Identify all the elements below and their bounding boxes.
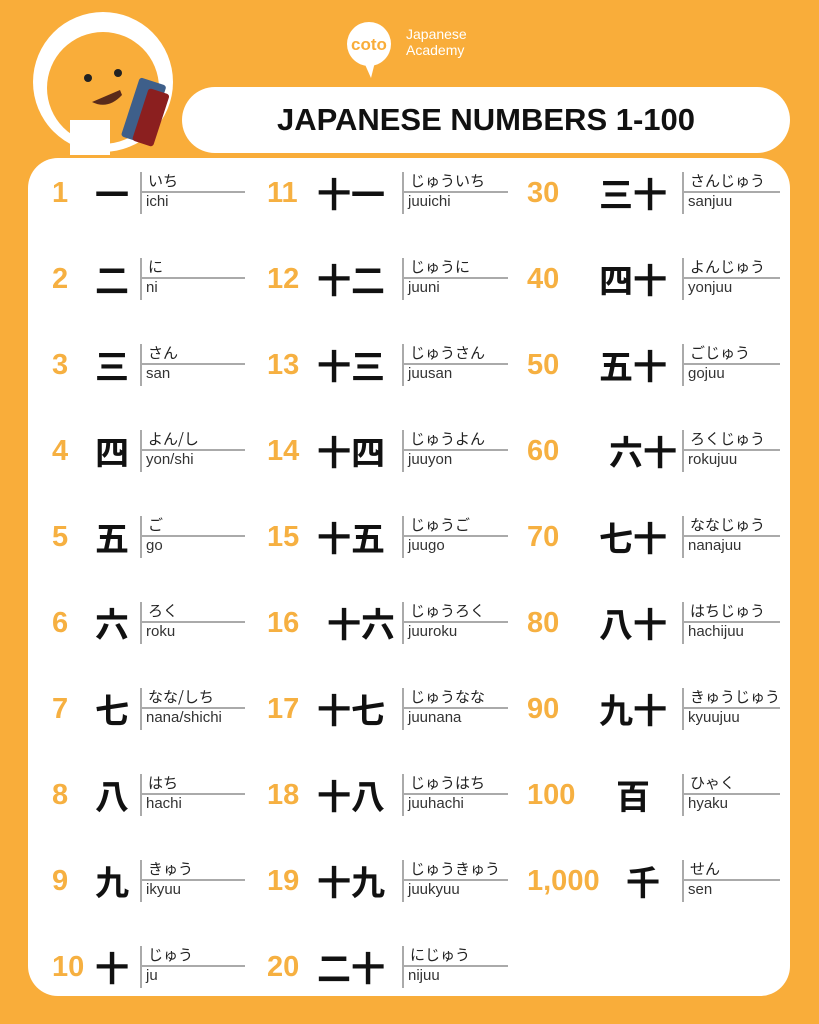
entry 6: 六 (95, 598, 129, 647)
entry 90: 90 (527, 693, 559, 725)
entry 30: 三十 (599, 168, 667, 217)
entry 6: ろく (148, 600, 178, 621)
entry 70 (527, 512, 780, 561)
entry 18: juuhachi (408, 795, 464, 812)
entry 5 (52, 512, 245, 561)
entry 12 (267, 254, 508, 303)
entry 4: yon/shi (146, 451, 194, 468)
entry 60: ろくじゅう (690, 428, 765, 449)
entry 15: juugo (408, 537, 445, 554)
entry 11: 十一 (317, 168, 385, 217)
entry 9: ikyuu (146, 881, 181, 898)
entry 50: gojuu (688, 365, 725, 382)
entry 19 (267, 856, 508, 905)
logo: coto (351, 35, 387, 54)
entry 13: 十三 (317, 340, 385, 389)
logo (347, 22, 467, 78)
entry 12: juuni (408, 279, 440, 296)
entry 16: 十六 (327, 598, 395, 647)
entry 18 (267, 770, 508, 819)
entry 13: juusan (408, 365, 452, 382)
entry 2: ni (146, 279, 158, 296)
entry 19: 19 (267, 865, 299, 897)
entry 3: 3 (52, 349, 68, 381)
entry 10 (52, 942, 245, 991)
entry 7 (52, 684, 245, 733)
entry 100 (527, 770, 780, 819)
entry 100: ひゃく (690, 772, 735, 793)
entry 5: ご (148, 514, 163, 535)
entry 16: 16 (267, 607, 299, 639)
entry 4: 四 (95, 426, 129, 475)
entry 100: 百 (616, 770, 650, 819)
entry 40: よんじゅう (690, 256, 765, 277)
entry 3 (52, 340, 245, 389)
panel: numbers (28, 158, 790, 996)
entry 30 (527, 168, 780, 217)
entry 9: 9 (52, 865, 68, 897)
entry 18: 十八 (317, 770, 385, 819)
entry 70: ななじゅう (690, 514, 765, 535)
entry 15 (267, 512, 508, 561)
entry 60: 六十 (609, 426, 677, 475)
entry 6: roku (146, 623, 175, 640)
entry 20: 20 (267, 951, 299, 983)
entry 40: 四十 (599, 254, 667, 303)
entry 3: san (146, 365, 170, 382)
entry 20: 二十 (317, 942, 385, 991)
entry 17: 17 (267, 693, 299, 725)
entry 16 (267, 598, 508, 647)
entry 17 (267, 684, 508, 733)
entry 40: 40 (527, 263, 559, 295)
entry 19: 十九 (317, 856, 385, 905)
entry 70: 七十 (599, 512, 667, 561)
entry 70: 70 (527, 521, 559, 553)
entry 19: じゅうきゅう (410, 858, 500, 879)
title banner (182, 87, 790, 153)
entry 7: なな/しち (148, 686, 214, 707)
entry 80 (527, 598, 780, 647)
entry 11: 11 (267, 177, 298, 209)
entry 15: じゅうご (410, 514, 470, 535)
entry 30: さんじゅう (690, 170, 765, 191)
entry 2: に (148, 256, 163, 277)
entry 20 (267, 942, 508, 991)
entry 5: 5 (52, 521, 68, 553)
entry 10: じゅう (148, 944, 193, 965)
entry 17: じゅうなな (410, 686, 485, 707)
entry 50: 五十 (599, 340, 667, 389)
title banner: JAPANESE NUMBERS 1-100 (277, 102, 695, 137)
entry 13: じゅうさん (410, 342, 485, 363)
entry 1000: 1,000 (527, 865, 600, 897)
entry 1: 一 (95, 168, 129, 217)
entry 8: 八 (95, 770, 129, 819)
entry 14: じゅうよん (410, 428, 485, 449)
entry 9: きゅう (148, 858, 193, 879)
entry 4 (52, 426, 245, 475)
entry 2 (52, 254, 245, 303)
entry 20: にじゅう (410, 944, 470, 965)
entry 1000: 千 (626, 856, 660, 905)
entry 80: 80 (527, 607, 559, 639)
entry 50: 50 (527, 349, 559, 381)
entry 16: juuroku (408, 623, 457, 640)
entry 19: juukyuu (408, 881, 460, 898)
entry 13 (267, 340, 508, 389)
entry 60 (527, 426, 780, 475)
entry 70: nanajuu (688, 537, 741, 554)
entry 10: 10 (52, 951, 84, 983)
entry 2: 二 (95, 254, 129, 303)
entry 3: 三 (95, 340, 129, 389)
entry 10: 十 (95, 942, 129, 991)
entry 5: 五 (95, 512, 129, 561)
entry 30: 30 (527, 177, 559, 209)
entry 100: hyaku (688, 795, 728, 812)
entry 11: じゅういち (410, 170, 485, 191)
entry 12: 12 (267, 263, 299, 295)
entry 14: 14 (267, 435, 299, 467)
entry 16: じゅうろく (410, 600, 485, 621)
entry 8: はち (148, 772, 178, 793)
entry 18: じゅうはち (410, 772, 485, 793)
entry 2: 2 (52, 263, 68, 295)
entry 11: juuichi (408, 193, 451, 210)
entry 60: 60 (527, 435, 559, 467)
entry 1000: せん (690, 858, 720, 879)
entry 12: じゅうに (410, 256, 470, 277)
entry 1000 (527, 856, 780, 905)
entry 80: 八十 (599, 598, 667, 647)
entry 80: hachijuu (688, 623, 744, 640)
entry 8: hachi (146, 795, 182, 812)
entry 8: 8 (52, 779, 68, 811)
entry 1 (52, 168, 245, 217)
entry 6: 6 (52, 607, 68, 639)
entry 50: ごじゅう (690, 342, 750, 363)
entry 90: kyuujuu (688, 709, 740, 726)
logo: Japanese (406, 26, 467, 42)
entry 3: さん (148, 342, 178, 363)
entry 90: きゅうじゅう (690, 686, 780, 707)
entry 50 (527, 340, 780, 389)
entry 1: 1 (52, 177, 68, 209)
entry 14 (267, 426, 508, 475)
entry 12: 十二 (317, 254, 385, 303)
entry 7: 七 (95, 684, 129, 733)
entry 13: 13 (267, 349, 299, 381)
entry 4: よん/し (148, 428, 199, 449)
logo: Academy (406, 42, 464, 58)
entry 7: 7 (52, 693, 68, 725)
entry 17: 十七 (317, 684, 385, 733)
entry 15: 十五 (317, 512, 385, 561)
entry 90 (527, 684, 780, 733)
entry 90: 九十 (599, 684, 667, 733)
entry 9 (52, 856, 245, 905)
entry 1000: sen (688, 881, 712, 898)
entry 1: ichi (146, 193, 169, 210)
entry 60: rokujuu (688, 451, 737, 468)
entry 1: いち (148, 170, 178, 191)
entry 80: はちじゅう (690, 600, 765, 621)
entry 40: yonjuu (688, 279, 732, 296)
entry 20: nijuu (408, 967, 440, 984)
entry 14: juuyon (408, 451, 452, 468)
entry 9: 九 (95, 856, 129, 905)
entry 6 (52, 598, 245, 647)
entry 30: sanjuu (688, 193, 732, 210)
entry 100: 100 (527, 779, 575, 811)
entry 15: 15 (267, 521, 299, 553)
entry 5: go (146, 537, 163, 554)
entry 7: nana/shichi (146, 709, 222, 726)
mascot (33, 12, 173, 155)
entry 8 (52, 770, 245, 819)
entry 40 (527, 254, 780, 303)
entry 14: 十四 (317, 426, 385, 475)
entry 4: 4 (52, 435, 68, 467)
entry 18: 18 (267, 779, 299, 811)
entry 10: ju (146, 967, 158, 984)
entry 11 (267, 168, 508, 217)
entry 17: juunana (408, 709, 461, 726)
